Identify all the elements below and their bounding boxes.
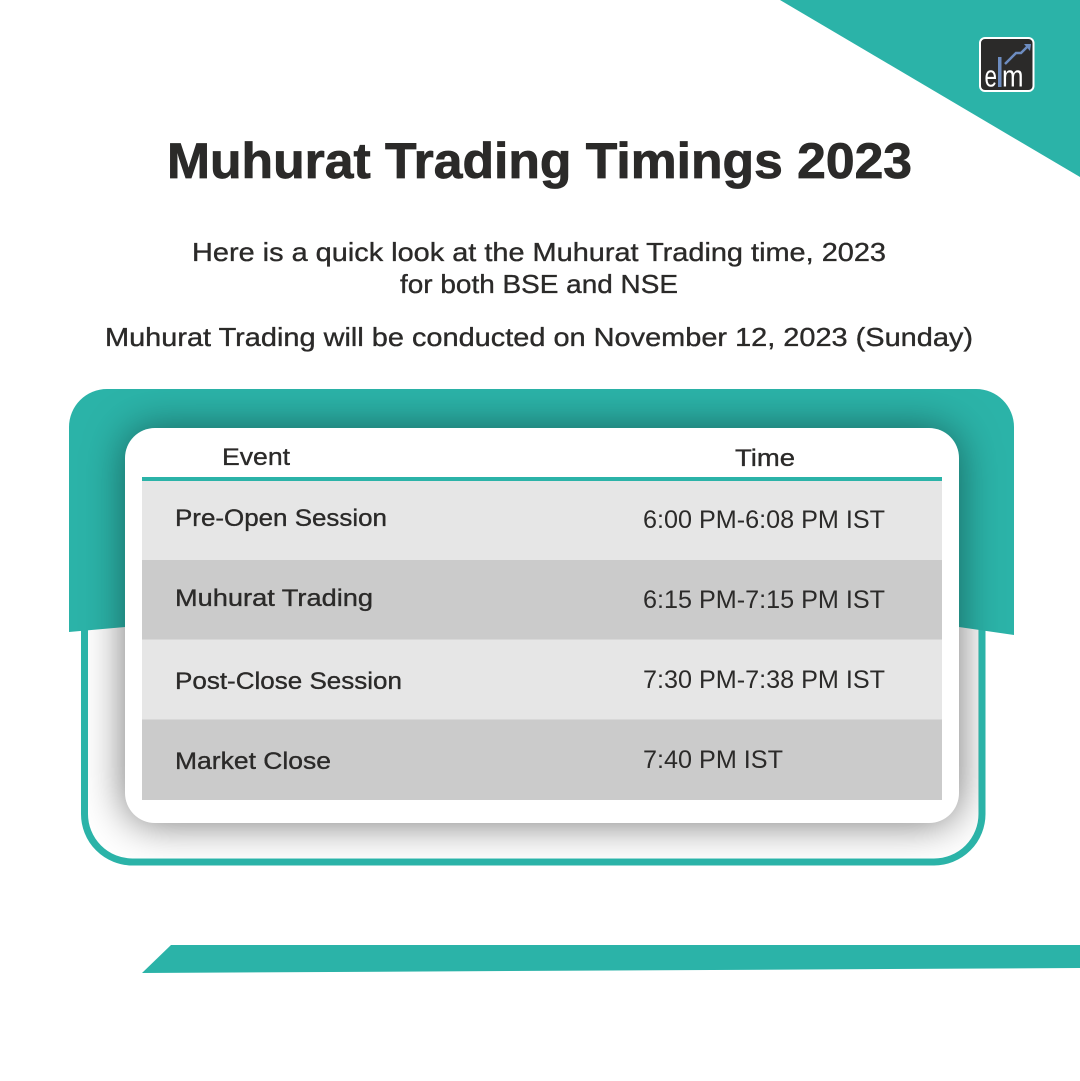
row: pre-open: Pre-Open Session [175, 505, 387, 532]
icon: rising arrow [1005, 47, 1027, 64]
frame outline [84, 560, 982, 862]
column header: time: Time [735, 445, 795, 472]
table [142, 444, 942, 800]
row: market close: Market Close [175, 748, 331, 775]
logo [980, 38, 1034, 94]
row: pre-open: 6:00 PM-6:08 PM IST [643, 506, 885, 534]
logo letter m: m [1002, 58, 1024, 94]
corner triangle [780, 0, 1080, 177]
logo letter e: e [984, 58, 997, 94]
title: Muhurat Trading Timings 2023 [167, 133, 912, 189]
row: post-close: Post-Close Session [175, 668, 402, 695]
date note: Muhurat Trading will be conducted on November 12, 2023 (Sunday) [105, 322, 973, 352]
bottom band [142, 945, 1080, 973]
header shape shadow [100, 403, 984, 630]
row: pre-open [142, 481, 942, 560]
row: market close: 7:40 PM IST [643, 746, 783, 774]
intro text: Here is a quick look at the Muhurat Trading time, 2023 [192, 237, 886, 267]
card shadow in frame [94, 627, 979, 854]
intro text [192, 237, 886, 299]
panel: table frame [69, 389, 1014, 862]
teal header shape [69, 389, 1014, 635]
row: market close [142, 720, 942, 800]
logo bar [998, 57, 1002, 87]
column header: event: Event [222, 444, 290, 471]
header rule [142, 477, 942, 481]
intro text: for both BSE and NSE [400, 269, 678, 299]
row: muhurat: 6:15 PM-7:15 PM IST [643, 586, 885, 614]
row: post-close [142, 640, 942, 720]
row: muhurat [142, 560, 942, 640]
white card [125, 428, 959, 823]
row: muhurat: Muhurat Trading [175, 585, 373, 612]
row: post-close: 7:30 PM-7:38 PM IST [643, 666, 885, 694]
